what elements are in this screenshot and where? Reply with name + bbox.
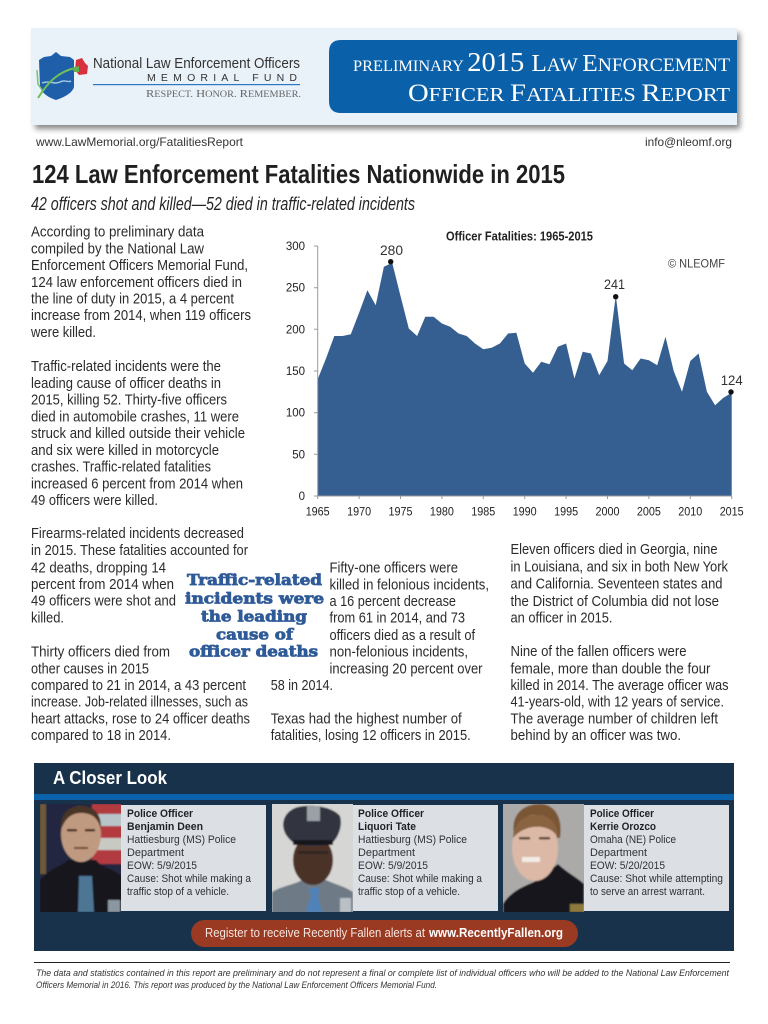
body text: felonious paragraph: increasing 20 percent over [330,660,482,677]
body text: intro paragraph: increase from 2014, when 119 officers [31,307,251,324]
body text: felonious paragraph: officers died as a result of [330,627,476,644]
body text: states paragraph: Eleven officers died in Georgia, nine [510,541,718,558]
officer details: Department [127,847,185,859]
officer details: traffic stop of a vehicle. [127,886,229,898]
body text: traffic paragraph: 49 officers were killed. [31,492,158,509]
logo text: MEMORIAL FUND [147,72,297,84]
body text: intro paragraph: According to preliminary data [31,224,205,241]
body text: demographics paragraph: killed in 2014. The average officer was [510,677,728,694]
body text: intro paragraph: the line of duty in 2015, a 4 percent [31,290,235,308]
logo text: RESPECT. HONOR. REMEMBER. [146,88,301,100]
x axis labels: 1975 [388,506,412,518]
y axis labels: 100 [286,408,305,420]
header banner [31,28,740,129]
body text: intro paragraph [30,224,251,341]
officer details [127,808,252,898]
officer details: Cause: Shot while attempting [590,873,723,885]
body text: Texas paragraph [271,710,471,744]
website link: www.LawMemorial.org/FatalitiesReport [35,135,244,149]
body text: states paragraph: in Louisiana, and six in both New York [510,559,728,576]
registration button [191,920,578,947]
body text: felonious paragraph [271,560,489,694]
data point: 2015 [721,372,743,395]
body text: traffic paragraph [31,358,245,509]
body text: traffic paragraph: 2015, killing 52. Thirty-five officers [31,392,227,408]
x axis labels: 1985 [471,506,495,518]
body text: other causes paragraph: Thirty officers died from [31,644,170,661]
body text: firearms paragraph: killed. [31,609,64,626]
y axis labels: 300 [286,241,305,253]
photo: Kerrie Orozco [503,804,584,912]
area series [318,263,732,496]
photo: Benjamin Deen [40,804,121,912]
body text: felonious paragraph: from 61 in 2014, and 73 [330,610,465,627]
area chart: officer fatalities 1965-2015 [286,230,744,518]
body text: felonious paragraph: a 16 percent decrease [330,593,456,610]
y axis labels: 150 [286,366,305,378]
axes [314,246,732,499]
body text: other causes paragraph: heart attacks, rose to 24 officer deaths [31,710,250,727]
body text: demographics paragraph: The average number of children left [510,710,719,727]
officer details: Police Officer [358,808,425,820]
body text: traffic paragraph: crashes. Traffic-related fatalities [31,458,211,476]
officer details: Liquori Tate [358,821,416,833]
body text: states paragraph [510,541,728,627]
body text: traffic paragraph: and six were killed in motorcycle [31,442,219,459]
x axis labels: 2015 [720,506,744,518]
body text: demographics paragraph: Nine of the fallen officers were [510,643,686,660]
body text: intro paragraph: were killed. [30,324,96,341]
body text: traffic paragraph: leading cause of officer deaths in [31,375,221,392]
body text: other causes paragraph: other causes in 2015 [31,660,149,677]
body text: demographics paragraph: 41-years-old, with 12 years of service. [510,694,724,711]
officer details: EOW: 5/9/2015 [127,860,197,872]
y axis labels: 200 [286,324,305,336]
officer details: Department [590,847,648,859]
email link: info@nleomf.org [645,135,732,149]
body text: demographics paragraph [510,643,728,744]
y axis labels: 50 [292,449,305,461]
body text: firearms paragraph: 49 officers were shot and [31,593,176,610]
body text: firearms paragraph [31,525,248,626]
pull quote: Traffic-related [187,571,323,589]
officer details: Benjamin Deen [127,821,203,833]
footer disclaimer: The data and statistics contained in this report are preliminary and do not represent a final or complete list of individual officers who will be added to the National Law Enforcement [36,968,729,978]
body text: firearms paragraph: percent from 2014 when [31,576,174,593]
y axis labels [286,241,305,503]
officer details: Hattiesburg (MS) Police [358,834,467,846]
report title box: OFFICER FATALITIES REPORT [408,80,730,107]
body text: other causes paragraph: increase. Job-related illnesses, such as [31,694,248,711]
officer details: Omaha (NE) Police [590,834,676,846]
body text: intro paragraph: Enforcement Officers Memorial Fund, [31,257,248,274]
body text: demographics paragraph: behind by an officer was two. [510,727,681,744]
x axis labels [306,506,744,518]
officer details [358,808,483,898]
body text: firearms paragraph: 42 deaths, dropping 14 [31,559,166,576]
pull quote: the leading [201,608,308,626]
y axis labels: 0 [299,491,305,503]
body text: demographics paragraph: female, more than double the four [510,660,711,677]
logo text [93,56,301,100]
footer disclaimer [36,968,729,990]
officer details: Department [358,847,416,859]
panel heading: A Closer Look [53,768,168,788]
report title box: PRELIMINARY 2015 LAW ENFORCEMENT [353,47,730,77]
logo text: National Law Enforcement Officers [93,56,300,72]
x axis labels: 1965 [306,506,330,518]
body text: intro paragraph: 124 law enforcement officers died in [31,274,242,291]
body text: felonious paragraph: 58 in 2014. [271,677,333,694]
main heading: 124 Law Enforcement Fatalities Nationwide in 2015 [32,159,565,189]
body text: other causes paragraph: compared to 21 in 2014, a 43 percent [31,677,247,694]
body text: firearms paragraph: in 2015. These fatalities accounted for [31,542,248,559]
body text: traffic paragraph: died in automobile crashes, 11 were [31,408,239,425]
officer details: Police Officer [127,808,194,820]
y axis labels: 250 [286,283,305,295]
officer details: Cause: Shot while making a [358,873,483,885]
pull quote: cause of [216,625,295,643]
x axis labels: 2005 [637,506,661,518]
panel: a closer look [34,763,734,951]
body text: Texas paragraph: Texas had the highest number of [271,710,462,727]
report title box [329,40,737,113]
officer details: traffic stop of a vehicle. [358,886,460,898]
data point: 1974 peak: 280 [380,242,403,258]
body text: felonious paragraph: Fifty-one officers were [330,560,458,577]
footer disclaimer: Officers Memorial in 2016. This report was produced by the National Law Enforcement Officers Memorial Fund. [36,980,437,990]
x axis labels: 1980 [430,506,454,518]
officer card: Benjamin Deen [36,800,266,916]
body text: felonious paragraph: killed in felonious incidents, [330,576,489,593]
body text: traffic paragraph: increased 6 percent from 2014 when [31,475,243,492]
logo: shield and rose [37,52,88,100]
x axis labels: 1995 [554,506,578,518]
registration button: Register to receive Recently Fallen alerts at [205,926,425,940]
officer details: Police Officer [590,808,654,820]
x axis labels: 1990 [513,506,537,518]
pull quote: officer deaths [189,643,318,661]
officer details: to serve an arrest warrant. [590,886,705,898]
officer details [590,808,723,898]
body text: states paragraph: the District of Columbia did not lose [510,593,719,610]
chart title: Officer Fatalities: 1965-2015 [446,230,593,244]
data point: 2001 peak [604,276,625,299]
data point: 2001 peak: 241 [604,276,625,292]
officer details: Cause: Shot while making a [127,873,252,885]
registration button: www.RecentlyFallen.org [428,926,563,940]
officer details: Kerrie Orozco [590,821,656,833]
body text: felonious paragraph: non-felonious incidents, [330,644,468,661]
body text: other causes paragraph: compared to 18 in 2014. [31,727,171,744]
body text: Texas paragraph: fatalities, losing 12 officers in 2015. [271,727,471,744]
body text: states paragraph: and California. Seventeen states and [510,575,722,592]
body text: firearms paragraph: Firearms-related incidents decreased [31,525,244,542]
officer details: Hattiesburg (MS) Police [127,834,236,846]
x axis labels: 1970 [347,506,371,518]
officer card: Liquori Tate [268,800,498,916]
officer details: EOW: 5/9/2015 [358,860,428,872]
pull quote: incidents were [185,589,324,607]
subheading: 42 officers shot and killed—52 died in traffic-related incidents [31,194,415,214]
x axis labels: 2010 [678,506,702,518]
body text: traffic paragraph: Traffic-related incidents were the [31,358,221,375]
officer details: EOW: 5/20/2015 [590,860,665,872]
photo: Liquori Tate [272,804,353,912]
data point: 2015: 124 [721,372,743,388]
x axis labels: 2000 [596,506,620,518]
pull quote [185,571,324,661]
body text: traffic paragraph: struck and killed outside their vehicle [31,425,245,442]
officer card: Kerrie Orozco [499,800,729,916]
body text: other causes paragraph [31,644,250,744]
body text: intro paragraph: compiled by the National Law [31,240,204,257]
copyright note: © NLEOMF [668,259,725,271]
body text: states paragraph: an officer in 2015. [510,610,612,627]
